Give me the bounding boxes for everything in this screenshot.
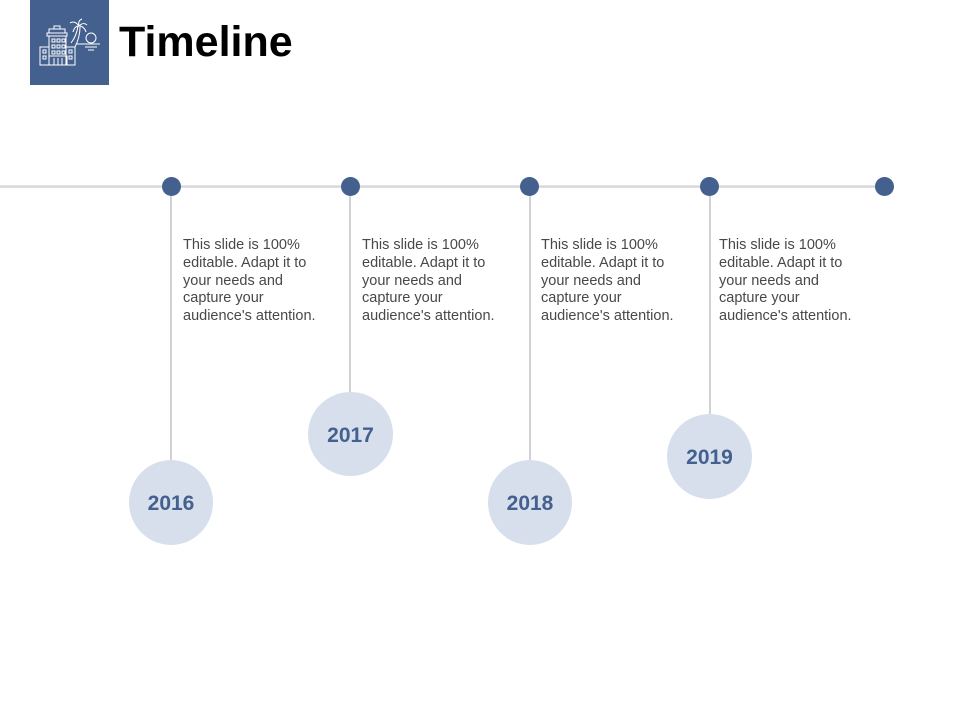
year circle 2019	[667, 414, 752, 499]
year circle 2019: 2019	[686, 446, 733, 469]
connector 2016	[170, 186, 172, 461]
text block 2019: This slide is 100%	[719, 237, 836, 253]
timeline end dot	[875, 177, 894, 196]
text block 2016: capture your	[183, 290, 264, 306]
year circle 2016: 2016	[148, 492, 194, 515]
icon: hotel and palm tree badge	[30, 0, 109, 85]
text block 2017: audience's attention.	[362, 308, 495, 324]
connector 2019	[709, 186, 711, 415]
text block 2016: your needs and	[183, 272, 283, 288]
timeline dot 2016	[162, 177, 181, 196]
text block 2018: your needs and	[541, 272, 641, 288]
text block 2017: editable. Adapt it to	[362, 255, 485, 271]
text block 2018: audience's attention.	[541, 308, 674, 324]
text block 2017	[362, 237, 495, 324]
text block 2019: editable. Adapt it to	[719, 255, 842, 271]
horizontal timeline axis	[0, 185, 875, 188]
text block 2016	[183, 237, 316, 324]
text block 2019: capture your	[719, 290, 800, 306]
text block 2018	[541, 237, 674, 324]
timeline dot 2018	[520, 177, 539, 196]
text block 2019: your needs and	[719, 272, 819, 288]
text block 2018: capture your	[541, 290, 622, 306]
connector 2017	[349, 186, 351, 393]
year circle 2016	[129, 460, 213, 545]
text block 2017: capture your	[362, 290, 443, 306]
year circle 2018: 2018	[507, 492, 553, 515]
title: Timeline	[119, 18, 293, 66]
text block 2016: This slide is 100%	[183, 237, 300, 253]
text block 2016: editable. Adapt it to	[183, 255, 306, 271]
timeline dot 2017	[341, 177, 360, 196]
text block 2019: audience's attention.	[719, 308, 852, 324]
year circle 2017: 2017	[327, 424, 374, 447]
timeline dot 2019	[700, 177, 719, 196]
text block 2018: This slide is 100%	[541, 237, 658, 253]
text block 2017: your needs and	[362, 272, 462, 288]
text block 2016: audience's attention.	[183, 308, 316, 324]
connector 2018	[529, 186, 531, 461]
text block 2019	[719, 237, 852, 324]
text block 2018: editable. Adapt it to	[541, 255, 664, 271]
text block 2017: This slide is 100%	[362, 237, 479, 253]
year circle 2018	[488, 460, 572, 545]
year circle 2017	[308, 392, 393, 476]
